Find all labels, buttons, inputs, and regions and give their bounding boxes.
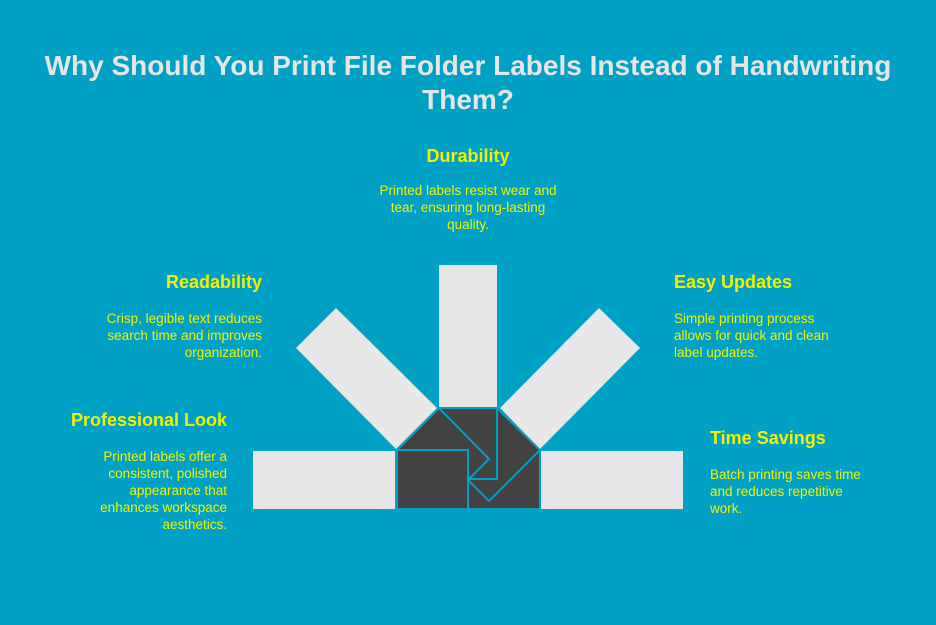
text: durability (379, 146, 557, 232)
text: easy updates: Easy Updates (674, 272, 792, 292)
text: time savings: Time Savings (710, 428, 826, 448)
text: readability (107, 272, 262, 360)
text: easy updates (674, 272, 829, 360)
text: time savings (710, 428, 861, 516)
text: professional look: Professional Look (71, 410, 227, 430)
text: readability: Readability (166, 272, 262, 292)
text: professional look (71, 410, 227, 532)
text: professional look: Printed labels offer a consistent, polished appearance that enhances workspace aesthetics. (100, 449, 227, 532)
title: Why Should You Print File Folder Labels Instead of Handwriting Them? (45, 50, 891, 115)
text: durability: Durability (426, 146, 510, 166)
text: readability: Crisp, legible text reduces search time and improves organization. (107, 311, 262, 360)
text: durability: Printed labels resist wear and tear, ensuring long-lasting quality. (379, 183, 557, 232)
text: easy updates: Simple printing process allows for quick and clean label updates. (674, 311, 829, 360)
text: time savings: Batch printing saves time and reduces repetitive work. (710, 467, 861, 516)
